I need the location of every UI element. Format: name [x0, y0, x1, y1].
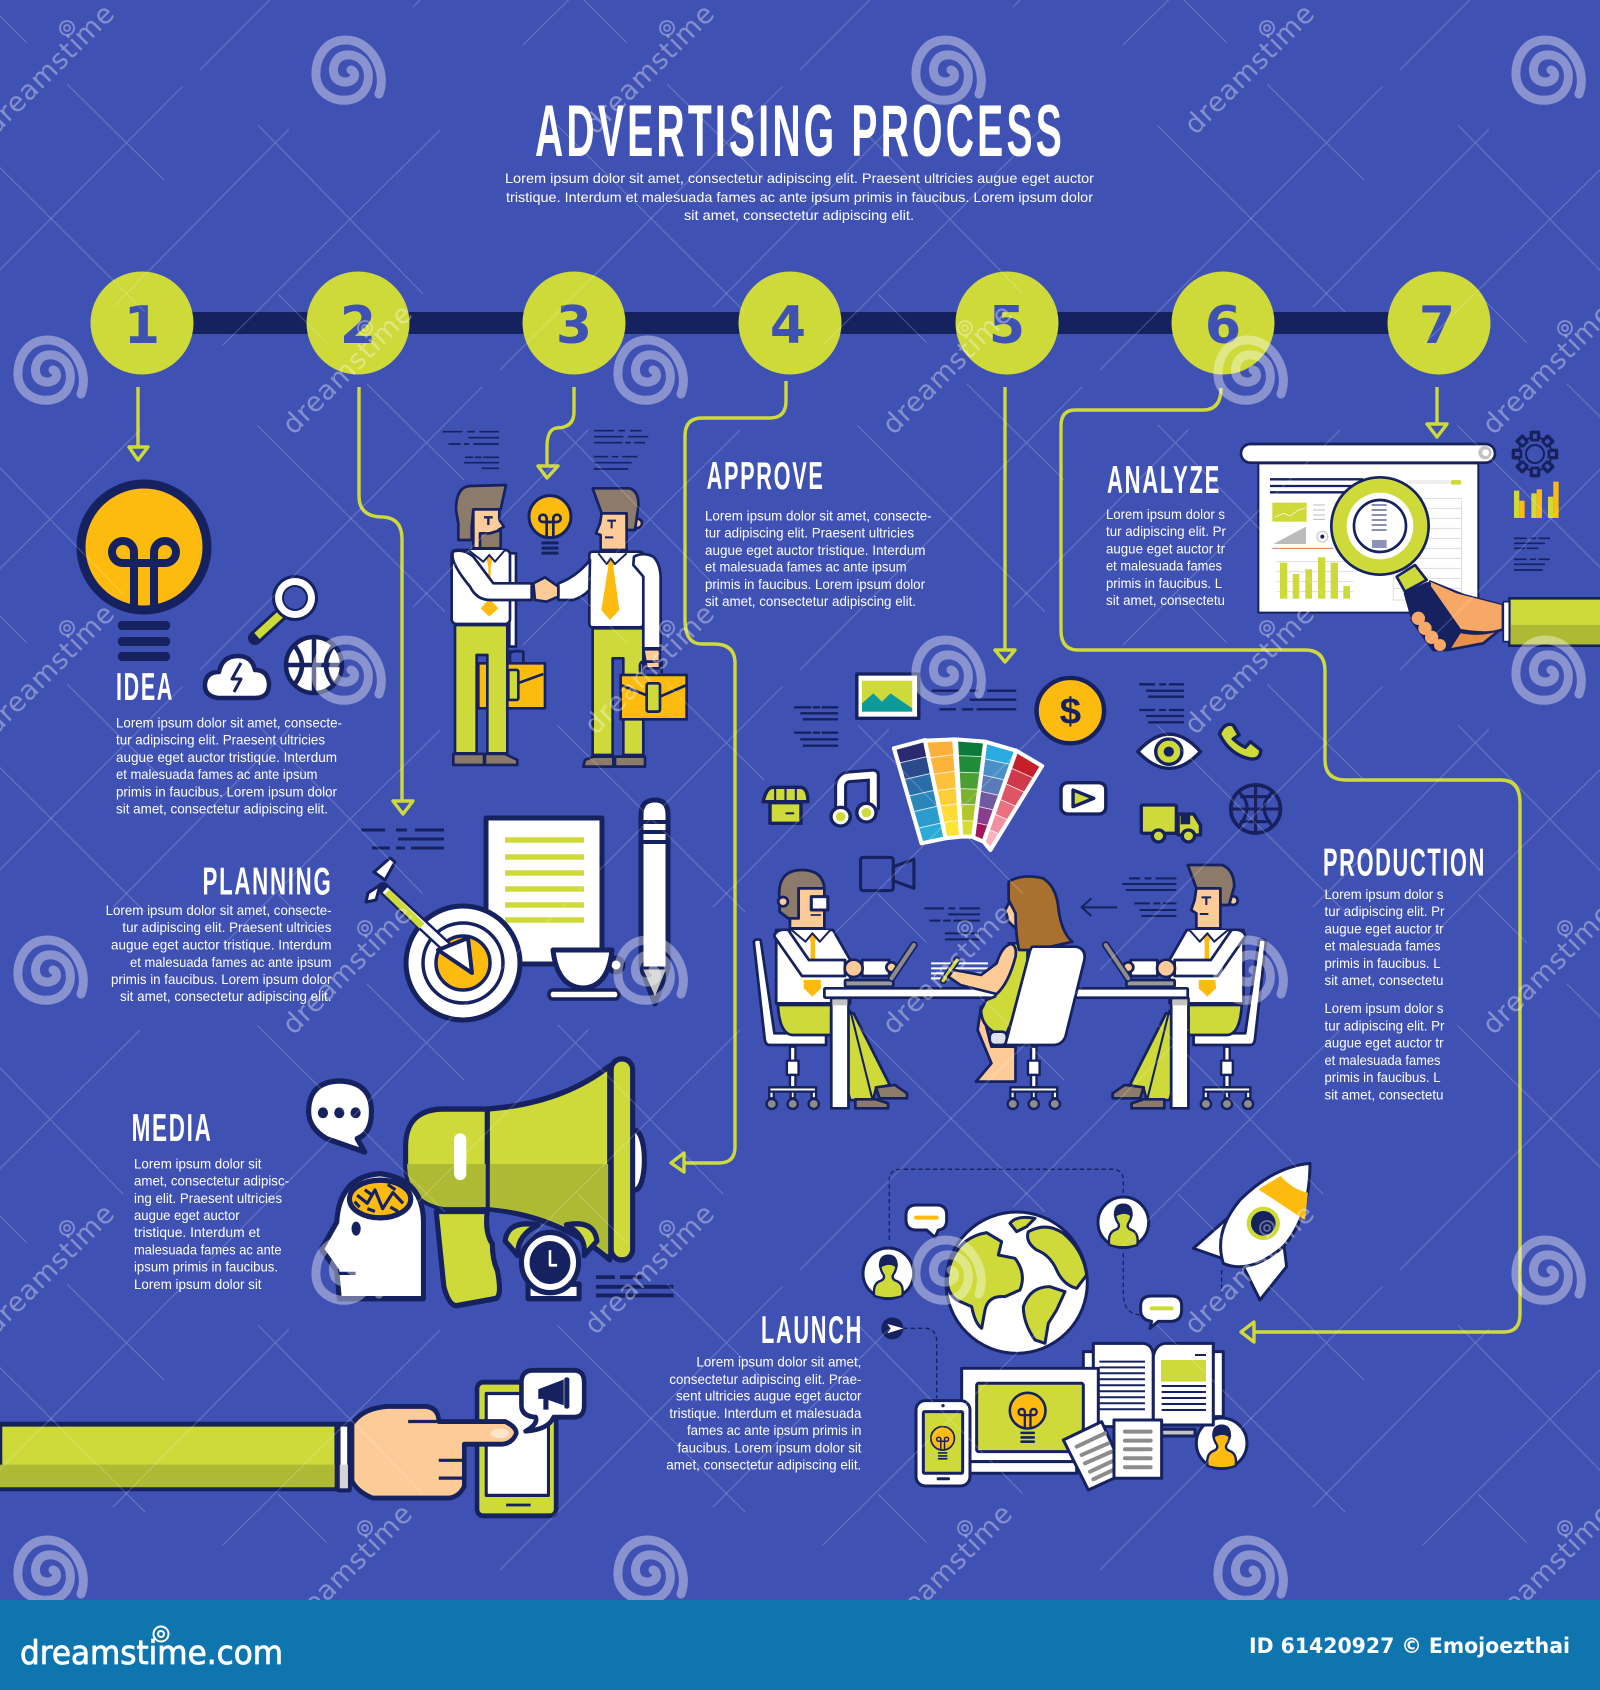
icon: ball globe: [286, 637, 342, 693]
step 2: 2: [340, 296, 376, 356]
text: production: et malesuada fames: [1324, 1052, 1440, 1068]
icon: dollar coin: $: [1060, 691, 1081, 732]
left man: [754, 870, 914, 1109]
step 6: 6: [1205, 296, 1241, 356]
text: media: amet, consectetur adipisc-: [134, 1172, 289, 1188]
arrow 6: [1061, 388, 1520, 1342]
text dashes: [443, 431, 648, 469]
color palette fan: [894, 739, 1042, 850]
arrow 7: [1427, 387, 1447, 437]
text: production: sit amet, consectetu: [1324, 1086, 1444, 1102]
illustration: analyze chart with magnifier: [1241, 432, 1600, 651]
text: planning: augue eget auctor tristique. Interdum: [111, 936, 332, 952]
handshake hands: [533, 577, 558, 602]
phone: [916, 1401, 970, 1486]
watermark words: dreamstime: [1179, 1199, 1321, 1341]
text: analyze: Lorem ipsum dolor s: [1106, 506, 1225, 522]
roller: [1241, 444, 1495, 463]
avatar left: [863, 1248, 914, 1299]
text dashes: [361, 830, 444, 848]
footer band: [0, 1600, 1600, 1690]
text: analyze: [1106, 506, 1226, 608]
text: production: primis in faucibus. L: [1324, 1069, 1441, 1085]
text: production: tur adipiscing elit. Pr: [1324, 1017, 1445, 1033]
text: analyze: et malesuada fames: [1106, 558, 1222, 574]
text: production: Lorem ipsum dolor s: [1324, 1000, 1444, 1016]
table top: [824, 988, 1188, 998]
text: planning: et malesuada fames ac ante ipsum: [130, 954, 332, 970]
text: approve: sit amet, consectetur adipiscing elit.: [705, 593, 916, 609]
watermark words: dreamstime: [277, 299, 419, 441]
connector arrows: [129, 381, 1520, 1342]
target: [366, 858, 520, 1020]
text: idea: augue eget auctor tristique. Interdum: [116, 749, 337, 765]
step 5: 5: [989, 296, 1025, 356]
small bulb: [529, 496, 571, 555]
heading: analyze: ANALYZE: [1107, 459, 1221, 502]
text: media: ing elit. Praesent ultricies: [134, 1190, 282, 1206]
watermark words: dreamstime: [877, 899, 1019, 1041]
left man briefcase: [478, 650, 545, 708]
woman: [948, 876, 1085, 1109]
icon: bars: [1514, 482, 1559, 518]
illustration: launch network: [863, 1163, 1310, 1490]
watermark words: dreamstime: [877, 1499, 1019, 1641]
text: planning: sit amet, consectetur adipiscing elit.: [120, 988, 332, 1004]
icon: video camera: [861, 857, 914, 891]
head with brain: [321, 1174, 423, 1299]
heading: launch: LAUNCH: [761, 1309, 863, 1352]
text dashes: [794, 684, 1184, 746]
alarm clock: [505, 1224, 597, 1299]
step 3: 3: [556, 296, 592, 356]
book: [1083, 1343, 1223, 1436]
icon: gear: [1513, 432, 1557, 476]
step 1: 1: [124, 296, 160, 356]
arrow 2: [359, 387, 413, 814]
heading: idea: IDEA: [116, 666, 174, 709]
text: production: et malesuada fames: [1324, 938, 1440, 954]
monitor: [962, 1368, 1098, 1473]
avatar bottom: [1196, 1418, 1247, 1469]
illustration: handshake: [443, 431, 687, 767]
rocket: [1193, 1163, 1310, 1300]
text dashes: [1514, 538, 1550, 570]
text: approve: et malesuada fames ac ante ipsum: [705, 559, 907, 575]
text dashes and arrow: [924, 878, 1176, 939]
step 4: 4: [770, 296, 806, 356]
text: launch: [666, 1354, 862, 1473]
dashed links: [889, 1169, 1222, 1398]
text: launch: fames ac ante ipsum primis in: [687, 1422, 862, 1438]
pencil: [641, 800, 668, 1004]
intro text: tristique. Interdum et malesuada fames ac ante ipsum primis in faucibus. Lorem ipsum dolor: [506, 189, 1093, 205]
step 4: [738, 272, 842, 374]
icon: big light bulb: [81, 484, 207, 661]
megaphone: [406, 1059, 644, 1306]
chat bubble right: [1141, 1296, 1182, 1328]
text: analyze: sit amet, consectetu: [1106, 592, 1225, 608]
text: media: augue eget auctor: [134, 1207, 240, 1223]
text: launch: consectetur adipiscing elit. Prae-: [669, 1371, 862, 1387]
watermark words: dreamstime: [277, 899, 419, 1041]
text: launch: tristique. Interdum et malesuada: [669, 1405, 862, 1421]
text: production: augue eget auctor tr: [1324, 920, 1444, 936]
sleeve: [1503, 598, 1600, 646]
text: approve: primis in faucibus. Lorem ipsum dolor: [705, 576, 925, 592]
text: media: ipsum primis in faucibus.: [134, 1259, 278, 1275]
text: media: Lorem ipsum dolor sit: [134, 1155, 262, 1171]
text: planning: tur adipiscing elit. Praesent ultricies: [122, 919, 331, 935]
step 7: [1388, 272, 1490, 374]
intro text: [505, 170, 1094, 223]
text: production: sit amet, consectetu: [1324, 972, 1444, 988]
heading: approve: APPROVE: [707, 455, 825, 498]
arrow 4: [671, 381, 786, 1172]
text: launch: sent ultricies augue eget auctor: [676, 1388, 862, 1404]
right man: [1106, 865, 1266, 1109]
timeline bar: [142, 312, 1439, 334]
arrow 5: [995, 387, 1015, 662]
illustration: hand pressing phone: [0, 1370, 584, 1516]
title: ADVERTISING PROCESS: [535, 91, 1065, 172]
watermark words: dreamstime: [1179, 599, 1321, 741]
icon: store: [763, 787, 808, 823]
text: launch: faucibus. Lorem ipsum dolor sit: [678, 1439, 862, 1455]
illustration: megaphone and head: [309, 1059, 673, 1306]
globe: [946, 1212, 1087, 1353]
text: launch: amet, consectetur adipiscing elit.: [666, 1457, 861, 1473]
left man: [452, 485, 532, 765]
magnifier: [1331, 477, 1429, 592]
step 1: [90, 272, 194, 374]
text: idea: et malesuada fames ac ante ipsum: [116, 766, 318, 782]
speech bubble: [309, 1081, 371, 1152]
text: media: malesuada fames ac ante: [134, 1242, 282, 1258]
intro text: sit amet, consectetur adipiscing elit.: [684, 207, 914, 223]
intro text: Lorem ipsum dolor sit amet, consectetur adipiscing elit. Praesent ultricies augue eget auctor: [505, 170, 1094, 186]
text: approve: [705, 508, 932, 609]
coffee cup: [549, 950, 623, 999]
text: production: augue eget auctor tr: [1324, 1035, 1444, 1051]
icon: photo: [857, 674, 919, 718]
icon: telephone: [1219, 724, 1261, 759]
step 2: [306, 272, 410, 374]
document: [486, 818, 602, 964]
text: analyze: primis in faucibus. L: [1106, 575, 1222, 591]
notepad and pencil: [931, 960, 988, 981]
text: production: primis in faucibus. L: [1324, 955, 1441, 971]
text: production: Lorem ipsum dolor s: [1324, 886, 1444, 902]
text: idea: sit amet, consectetur adipiscing elit.: [116, 801, 328, 817]
text: planning: Lorem ipsum dolor sit amet, consecte-: [106, 902, 332, 918]
illustration: meeting table: [754, 857, 1266, 1109]
text: approve: tur adipiscing elit. Praesent ultricies: [705, 525, 914, 541]
right man: [558, 488, 661, 767]
right man briefcase: [621, 662, 687, 719]
heading: media: MEDIA: [132, 1107, 213, 1150]
icon: eye: [1138, 734, 1200, 768]
step circles: [90, 272, 1490, 374]
text: media: [134, 1155, 289, 1292]
icon: truck: [1141, 805, 1200, 842]
text: planning: primis in faucibus. Lorem ipsum dolor: [111, 971, 332, 987]
chart sheet: [1258, 463, 1478, 613]
icon: cloud: [205, 656, 269, 698]
text: idea: tur adipiscing elit. Praesent ultricies: [116, 732, 325, 748]
avatar right: [1098, 1197, 1149, 1248]
icon: dollar coin: [1037, 678, 1104, 743]
illustration: production icons: [763, 674, 1280, 850]
text: production: [1324, 886, 1445, 1102]
icon: magnifier: [255, 575, 318, 638]
text: idea: [116, 714, 342, 817]
send icon: [881, 1317, 903, 1339]
text: production: tur adipiscing elit. Pr: [1324, 903, 1445, 919]
phone: [477, 1382, 556, 1516]
message bubble: [521, 1370, 584, 1431]
watermark words: dreamstime: [579, 1199, 721, 1341]
icon: music note: [831, 775, 876, 826]
step 5: [956, 272, 1058, 374]
text: idea: Lorem ipsum dolor sit amet, consecte-: [116, 714, 342, 730]
text: analyze: tur adipiscing elit. Pr: [1106, 523, 1226, 539]
text: approve: augue eget auctor tristique. Interdum: [705, 542, 926, 558]
papers: [1063, 1420, 1162, 1490]
footer logo mark: [154, 1626, 168, 1642]
footer logo: dreamstime.com: [20, 1633, 283, 1672]
text: idea: primis in faucibus. Lorem ipsum dolor: [116, 784, 337, 800]
step 6: [1172, 272, 1274, 374]
arrow 1: [129, 387, 148, 460]
arrow 3: [538, 387, 574, 478]
watermark words: dreamstime: [579, 0, 721, 141]
watermark words: dreamstime: [579, 599, 721, 741]
footer id: ID 61420927 © Emojoezthai: [1249, 1634, 1570, 1658]
text: planning: [106, 902, 332, 1004]
chat bubble left: [906, 1205, 947, 1237]
text: media: tristique. Interdum et: [134, 1224, 260, 1240]
text: launch: Lorem ipsum dolor sit amet,: [696, 1354, 861, 1370]
hand: [352, 1406, 516, 1498]
text dashes: [596, 1277, 673, 1295]
text: approve: Lorem ipsum dolor sit amet, consecte-: [705, 508, 932, 524]
watermark words: dreamstime: [1179, 0, 1321, 141]
heading: planning: PLANNING: [202, 861, 332, 904]
illustration: planning items: [361, 800, 668, 1020]
watermark words: dreamstime: [277, 1499, 419, 1641]
text: analyze: augue eget auctor tr: [1106, 540, 1225, 556]
step 7: 7: [1419, 296, 1455, 356]
text: media: Lorem ipsum dolor sit: [134, 1276, 262, 1292]
watermark words: dreamstime: [877, 299, 1019, 441]
hand: [1405, 582, 1502, 651]
step 3: [522, 272, 626, 374]
sleeve: [0, 1424, 349, 1490]
icon: play button: [1061, 783, 1106, 814]
icon: globe: [1231, 785, 1280, 833]
